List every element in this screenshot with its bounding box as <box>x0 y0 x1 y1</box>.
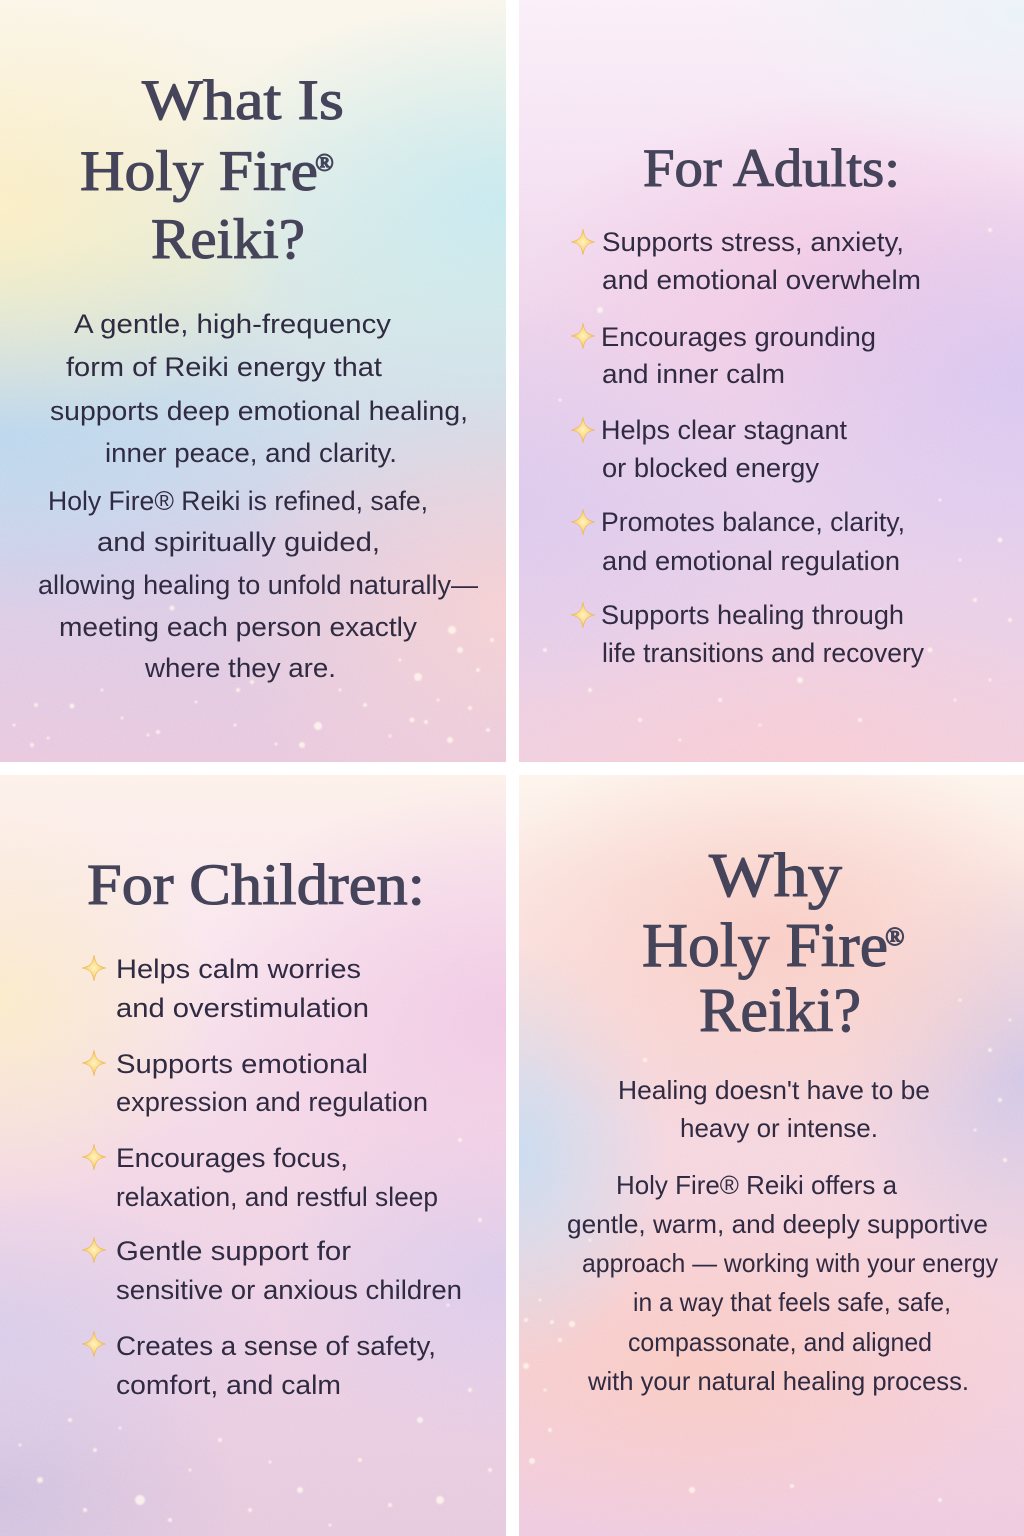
list item: safety: Creates a sense of safety, <box>116 1331 436 1361</box>
body text: definition: inner peace, and clarity. <box>105 438 397 468</box>
text block: for children <box>82 852 462 1400</box>
list item: expression <box>82 1049 428 1117</box>
list item: clear energy <box>571 415 847 483</box>
heading: what is holy fire reiki: Reiki? <box>151 208 305 271</box>
heading: what is holy fire reiki: ® <box>315 150 334 177</box>
heading: why holy fire reiki: Holy Fire <box>642 912 888 980</box>
body text: why <box>567 1075 998 1396</box>
list item: transitions <box>571 600 924 668</box>
body text: why: heavy or intense. <box>680 1113 878 1143</box>
list item: transitions: life transitions and recovery <box>602 638 924 668</box>
list item: clear energy: Helps clear stagnant <box>601 415 847 445</box>
list item: focus <box>82 1143 438 1212</box>
body text: why: with your natural healing process. <box>587 1366 969 1396</box>
list item: sensitive children <box>82 1236 462 1305</box>
body text: definition: where they are. <box>144 653 336 683</box>
list item: stress: and emotional overwhelm <box>602 265 921 295</box>
list item: safety <box>82 1331 436 1400</box>
list item: expression: Supports emotional <box>116 1049 368 1079</box>
panel: what is holy fire reiki background <box>0 0 506 762</box>
body text: definition: form of Reiki energy that <box>66 352 383 382</box>
heading: for children: For Children: <box>87 852 425 917</box>
body text: definition: A gentle, high-frequency <box>74 309 392 339</box>
body text: why: in a way that feels safe, safe, <box>633 1287 951 1317</box>
body text: definition: supports deep emotional healing, <box>50 396 468 426</box>
heading: why holy fire reiki: ® <box>885 922 904 951</box>
list item: worries: and overstimulation <box>116 993 369 1023</box>
heading: why holy fire reiki: Why <box>709 842 842 910</box>
list item: safety: comfort, and calm <box>116 1370 341 1400</box>
body text: why: Healing doesn't have to be <box>618 1075 930 1105</box>
panel: for children background <box>0 775 506 1536</box>
list item: focus: Encourages focus, <box>116 1143 348 1173</box>
text block: what is holy fire reiki <box>38 69 478 683</box>
body text: why: compassonate, and aligned <box>628 1327 932 1357</box>
heading: why holy fire reiki <box>642 842 904 1045</box>
heading: what is holy fire reiki: What Is <box>142 69 344 132</box>
list item: clear energy: or blocked energy <box>602 453 819 483</box>
panel: for adults background <box>519 0 1024 762</box>
body text: why: approach — working with your energy <box>582 1248 998 1278</box>
list item: balance: Promotes balance, clarity, <box>601 507 905 537</box>
body text: definition: Holy Fire® Reiki is refined, safe, <box>48 486 428 516</box>
body text: why: gentle, warm, and deeply supportive <box>567 1209 988 1239</box>
list item: focus: relaxation, and restful sleep <box>116 1182 438 1212</box>
body text: definition: and spiritually guided, <box>97 527 380 557</box>
list item: grounding: and inner calm <box>602 359 785 389</box>
heading: what is holy fire reiki: Holy Fire <box>80 140 318 203</box>
list item: stress <box>571 227 921 295</box>
list item: balance <box>571 507 905 576</box>
list item: worries <box>82 954 369 1023</box>
list item: grounding <box>571 322 876 389</box>
list item: worries: Helps calm worries <box>116 954 361 984</box>
body text: definition: allowing healing to unfold naturally— <box>38 570 478 600</box>
body text: why: Holy Fire® Reiki offers a <box>616 1170 898 1200</box>
list item: grounding: Encourages grounding <box>601 322 876 352</box>
list item: transitions: Supports healing through <box>601 600 904 630</box>
list item: expression: expression and regulation <box>116 1087 428 1117</box>
text block: for adults <box>571 138 924 668</box>
list item: stress: Supports stress, anxiety, <box>602 227 904 257</box>
list item: sensitive children: sensitive or anxious children <box>116 1275 462 1305</box>
heading: what is holy fire reiki <box>80 69 344 271</box>
heading: for adults: For Adults: <box>643 138 900 198</box>
list item: balance: and emotional regulation <box>602 546 900 576</box>
heading: why holy fire reiki: Reiki? <box>699 977 861 1045</box>
body text: definition <box>38 309 478 683</box>
panel: why holy fire reiki background <box>519 775 1024 1536</box>
body text: definition: meeting each person exactly <box>59 612 418 642</box>
text block: why holy fire reiki <box>567 842 998 1396</box>
list item: sensitive children: Gentle support for <box>116 1236 351 1266</box>
